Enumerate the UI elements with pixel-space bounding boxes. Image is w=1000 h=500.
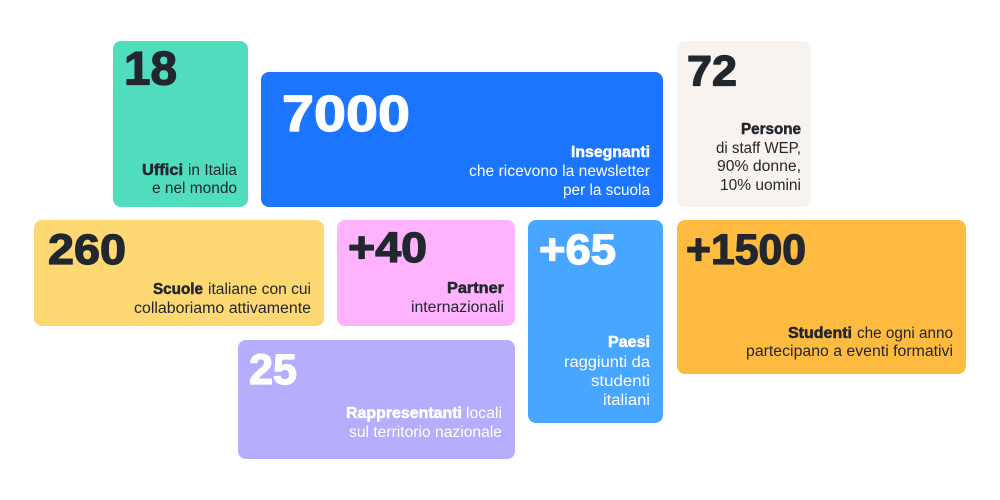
panel: +40 partner <box>337 220 515 326</box>
description: uffici: e nel mondo <box>152 180 237 197</box>
number: 25: 25 <box>249 346 297 394</box>
number: 7000: 7000 <box>282 85 410 142</box>
description: rappresentanti: Rappresentanti <box>346 405 462 422</box>
description: studenti <box>746 325 953 360</box>
panel: 25 rappresentanti <box>238 340 515 459</box>
description: persone: di staff WEP, <box>716 140 801 157</box>
description: persone <box>716 121 801 194</box>
number: 72: 72 <box>687 48 737 96</box>
number: +40: +40 <box>348 224 427 272</box>
description: uffici: in Italia <box>188 162 237 179</box>
description: studenti: che ogni anno <box>857 325 953 342</box>
description: partner <box>411 280 504 316</box>
description: scuole <box>134 281 311 317</box>
description: insegnanti: che ricevono la newsletter <box>469 163 650 180</box>
description: rappresentanti: locali <box>466 405 502 422</box>
description: uffici: Uffici <box>142 162 183 179</box>
panel: +65 paesi <box>528 220 663 423</box>
description: partner: internazionali <box>411 299 504 316</box>
number: +65: +65 <box>539 226 616 274</box>
description: scuole: italiane con cui <box>208 281 311 298</box>
description: rappresentanti: sul territorio nazionale <box>349 424 502 441</box>
number: 18: 18 <box>124 42 177 94</box>
panel: 18 uffici <box>113 41 248 207</box>
description: insegnanti: per la scuola <box>563 182 650 199</box>
description: paesi <box>564 334 650 409</box>
panel: 260 scuole <box>34 220 324 326</box>
description: partner: Partner <box>447 280 504 297</box>
description: persone: 90% donne, <box>717 158 801 175</box>
panel: +1500 studenti <box>677 220 966 374</box>
description: insegnanti <box>469 144 650 199</box>
description: paesi: italiani <box>603 392 650 409</box>
panel: 7000 insegnanti <box>261 72 663 207</box>
description: rappresentanti <box>346 405 502 441</box>
description: persone: 10% uomini <box>720 177 801 194</box>
description: paesi: Paesi <box>608 334 650 351</box>
description: paesi: raggiunti da <box>564 354 650 371</box>
description: insegnanti: Insegnanti <box>571 144 650 161</box>
panel: 72 persone <box>677 41 811 207</box>
description: paesi: studenti <box>591 373 650 390</box>
number: +1500: +1500 <box>686 226 806 274</box>
description: scuole: collaboriamo attivamente <box>134 300 311 317</box>
description: studenti: Studenti <box>788 325 852 342</box>
number: 260: 260 <box>48 226 126 274</box>
description: studenti: partecipano a eventi formativi <box>746 343 953 360</box>
description: scuole: Scuole <box>153 281 203 298</box>
description: persone: Persone <box>741 121 801 138</box>
description: uffici <box>142 162 237 197</box>
